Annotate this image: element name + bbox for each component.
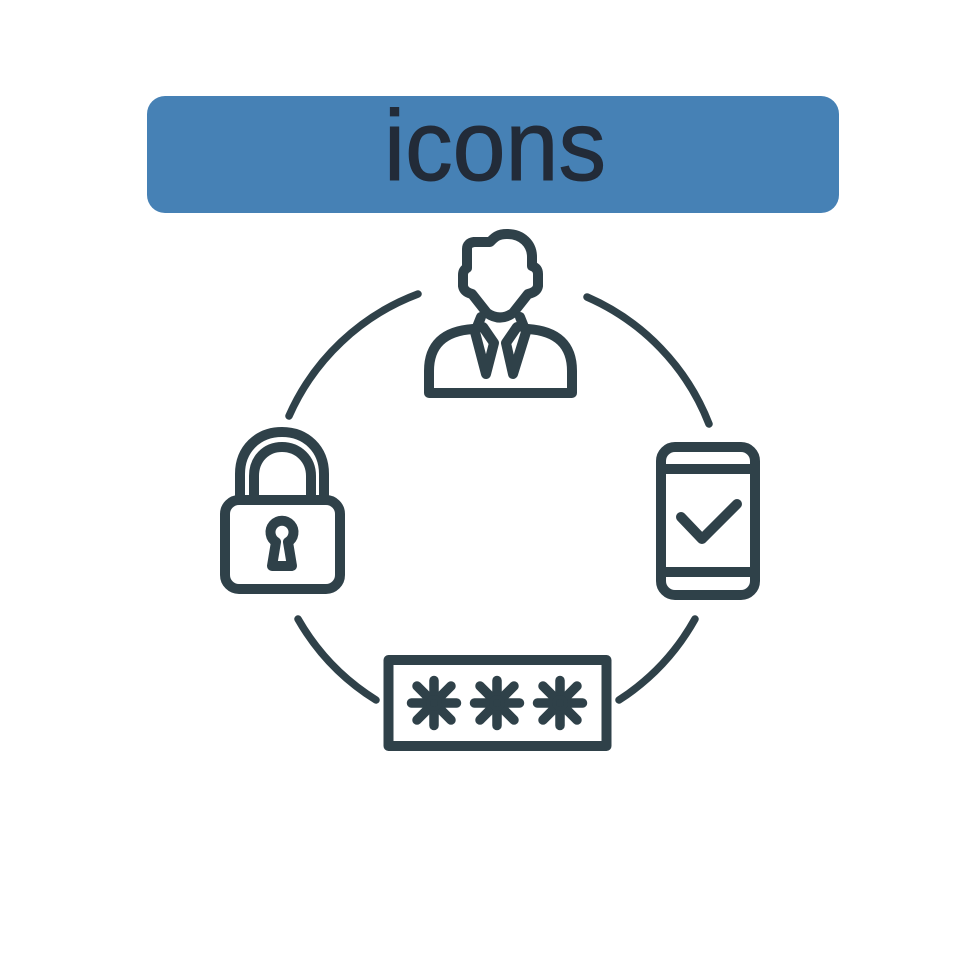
connecting ring arcs	[289, 294, 709, 700]
icon: padlock	[225, 432, 340, 589]
asterisk 3	[538, 680, 582, 726]
keyhole	[270, 521, 294, 566]
asterisk 1	[412, 680, 456, 726]
icon: businessman	[429, 234, 572, 393]
title text: icons	[384, 90, 606, 202]
title banner	[147, 90, 839, 213]
icon: password field	[388, 660, 606, 746]
asterisk 2	[474, 680, 520, 726]
icon: smartphone with check mark	[661, 447, 755, 595]
